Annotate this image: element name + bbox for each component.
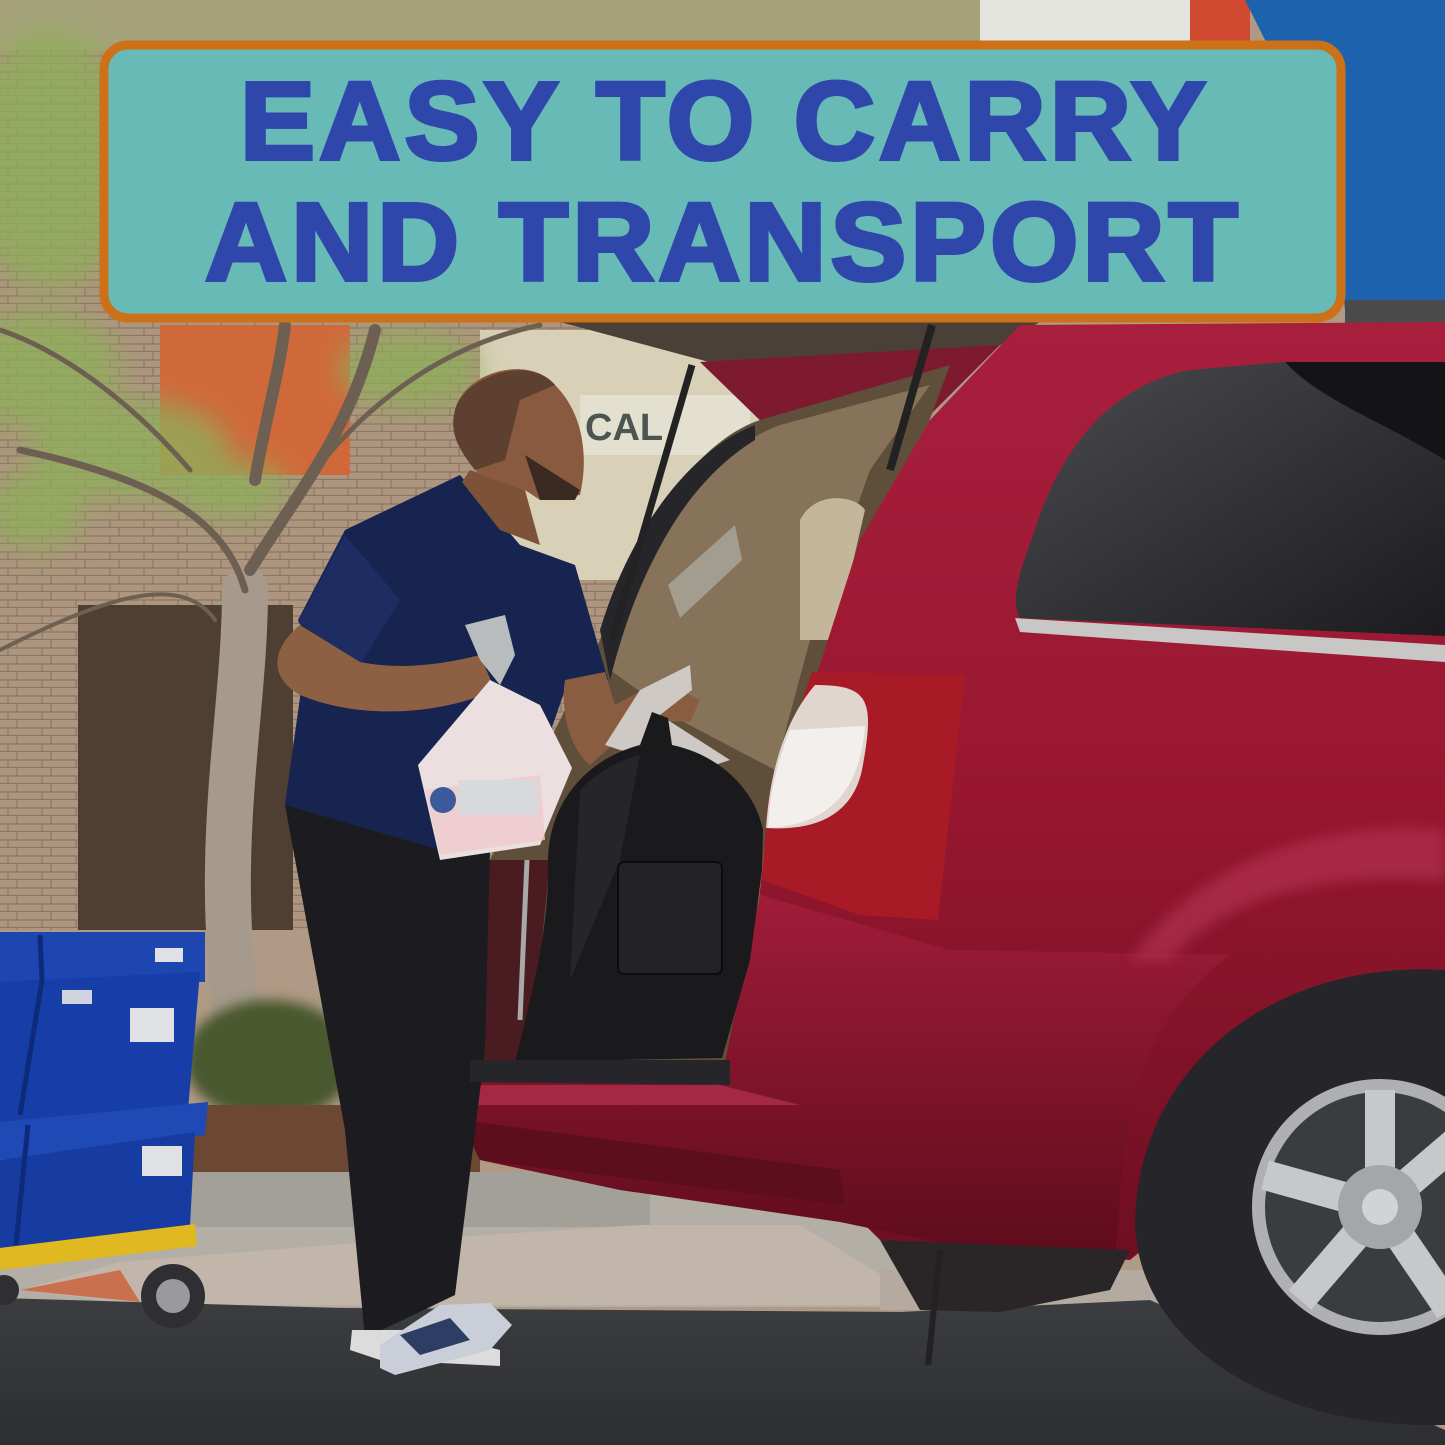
struts — [612, 365, 692, 640]
taillight — [762, 672, 965, 920]
open tailgate — [560, 322, 1040, 395]
road — [0, 1298, 1445, 1445]
heading line 2: AND TRANSPORT — [205, 181, 1242, 304]
blue crates on cart — [0, 932, 208, 1328]
second bag behind black bag — [605, 665, 730, 770]
tree — [0, 325, 540, 1040]
shoes — [350, 1330, 500, 1366]
under car shadow and rear-far wheel — [880, 1240, 1130, 1365]
rear wheel — [1135, 969, 1445, 1425]
rear window — [1016, 362, 1445, 636]
foliage — [0, 30, 480, 550]
dark cargo side beside bag — [465, 860, 550, 1060]
body — [755, 322, 1445, 1260]
bumper — [455, 895, 1230, 1258]
heading line 1: EASY TO CARRY — [240, 60, 1210, 183]
neck — [462, 470, 540, 545]
right arm — [564, 672, 700, 765]
black drawstring bag — [470, 712, 763, 1085]
pavement — [0, 1172, 1160, 1310]
title banner — [104, 45, 1341, 318]
white shopping bag — [418, 615, 572, 860]
highlight — [1130, 829, 1445, 960]
shirt — [285, 475, 608, 850]
background: building and sky: CAL — [585, 407, 663, 449]
head — [453, 369, 584, 500]
cargo interior — [490, 365, 950, 1060]
man — [277, 369, 700, 1375]
left arm — [277, 625, 495, 711]
shrubs and mulch — [185, 1000, 480, 1173]
minivan — [455, 322, 1445, 1260]
trousers — [285, 805, 490, 1338]
